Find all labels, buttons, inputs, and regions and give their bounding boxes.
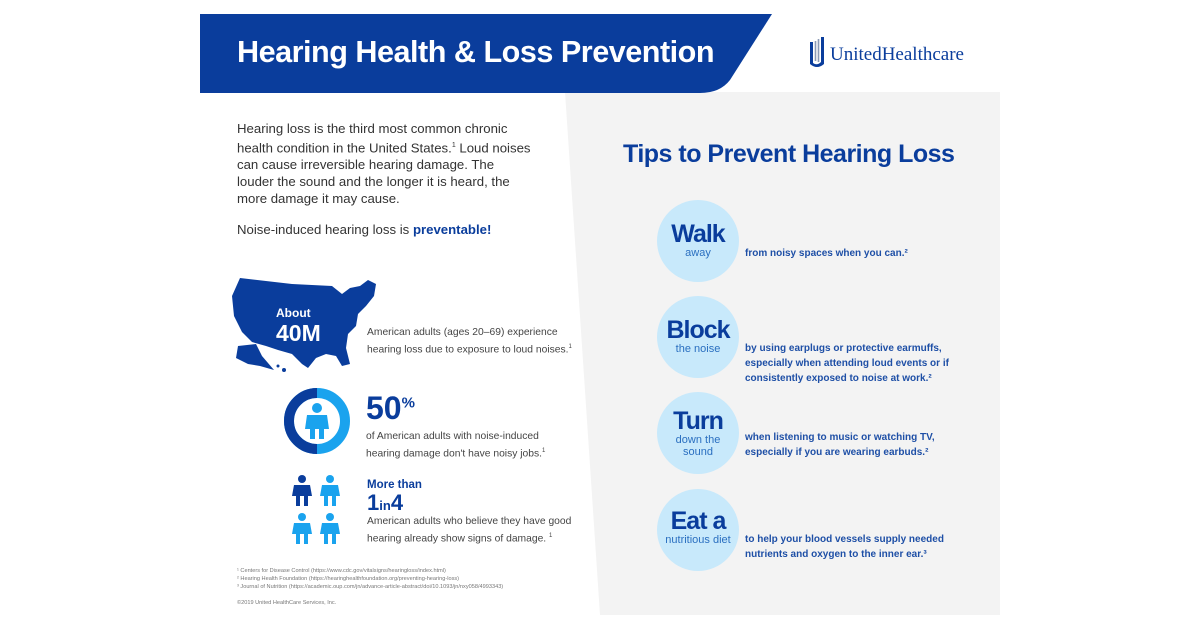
map label: About	[276, 306, 311, 320]
tip text: turn	[745, 432, 935, 458]
intro text: more damage it may cause.	[237, 191, 400, 206]
US map	[232, 278, 376, 372]
donut	[284, 388, 350, 454]
tip circle: eat: nutritious diet	[665, 534, 731, 546]
tip text: eat	[745, 534, 944, 560]
intro text: health condition in the United States.1 Loud noises	[237, 140, 531, 155]
text	[367, 516, 571, 544]
stat text: American adults (ages 20–69) experience	[367, 327, 558, 338]
footnotes: ¹ Centers for Disease Control (https://www.cdc.gov/vitalsigns/hearingloss/index.html)	[237, 568, 446, 574]
text: American adults who believe they have good	[367, 516, 571, 527]
intro text: louder the sound and the longer it is heard, the	[237, 174, 510, 189]
tip text: turn: when listening to music or watching TV,	[745, 432, 935, 443]
tip circle: eat: Eat a	[671, 507, 725, 535]
map label: 40M	[276, 320, 321, 346]
intro text	[237, 121, 531, 206]
icon: logo mark	[810, 37, 824, 67]
tip circle: block: the noise	[676, 343, 720, 355]
tip text: eat: to help your blood vessels supply needed	[745, 534, 944, 545]
tip circle: eat	[657, 489, 739, 571]
copyright: ©2019 United HealthCare Services, Inc.	[237, 600, 336, 606]
stat: 50%	[284, 388, 546, 459]
tips heading: Tips to Prevent Hearing Loss	[623, 140, 954, 168]
tip circle: block: Block	[666, 316, 730, 344]
tip circle: walk: Walk	[671, 220, 725, 248]
tip circle: turn: sound	[683, 446, 713, 458]
tip text: walk: from noisy spaces when you can.²	[745, 248, 908, 259]
tip text: block: especially when attending loud events or if	[745, 358, 949, 369]
text: hearing damage don't have noisy jobs.1	[366, 448, 545, 459]
text	[366, 431, 546, 459]
heading: 1in4	[367, 490, 403, 515]
tip circle: walk	[657, 200, 739, 282]
tip circle: turn: down the	[676, 434, 720, 446]
tip circle: turn	[657, 392, 739, 474]
stat: 1 in 4	[292, 475, 571, 544]
people icons	[292, 475, 340, 544]
logo	[810, 37, 964, 67]
percent: 50%	[366, 390, 415, 426]
stat text	[367, 327, 572, 355]
tip circle: turn: Turn	[673, 407, 723, 435]
footnotes: ³ Journal of Nutrition (https://academic.oup.com/jn/advance-article-abstract/doi/10.1093/jn/nxy058/4993343)	[237, 584, 503, 590]
tip circle: walk: away	[685, 247, 711, 259]
tip text: block: by using earplugs or protective earmuffs,	[745, 343, 942, 354]
title banner	[200, 14, 772, 93]
intro text: Hearing loss is the third most common chronic	[237, 121, 507, 136]
map label	[276, 306, 321, 346]
text: hearing already show signs of damage. 1	[367, 533, 552, 544]
footnotes: ² Hearing Health Foundation (https://hearinghealthfoundation.org/preventing-hearing-loss)	[237, 576, 459, 582]
text: of American adults with noise-induced	[366, 431, 539, 442]
logo: UnitedHealthcare	[830, 44, 964, 65]
tip text: block: consistently exposed to noise at work.²	[745, 373, 932, 384]
footnotes	[237, 568, 503, 590]
stat: 40M	[232, 278, 572, 372]
intro text: can cause irreversible hearing damage. The	[237, 157, 494, 172]
heading	[367, 479, 422, 515]
tip text: eat: nutrients and oxygen to the inner ear.³	[745, 549, 927, 560]
preventable line: Noise-induced hearing loss is preventable!	[237, 222, 491, 237]
tip text: turn: especially if you are wearing earbuds.²	[745, 447, 928, 458]
heading: More than	[367, 479, 422, 491]
tip circle: block	[657, 296, 739, 378]
stat text: hearing loss due to exposure to loud noises.1	[367, 344, 572, 355]
title: Hearing Health & Loss Prevention	[237, 35, 714, 69]
tip text: block	[745, 343, 949, 384]
